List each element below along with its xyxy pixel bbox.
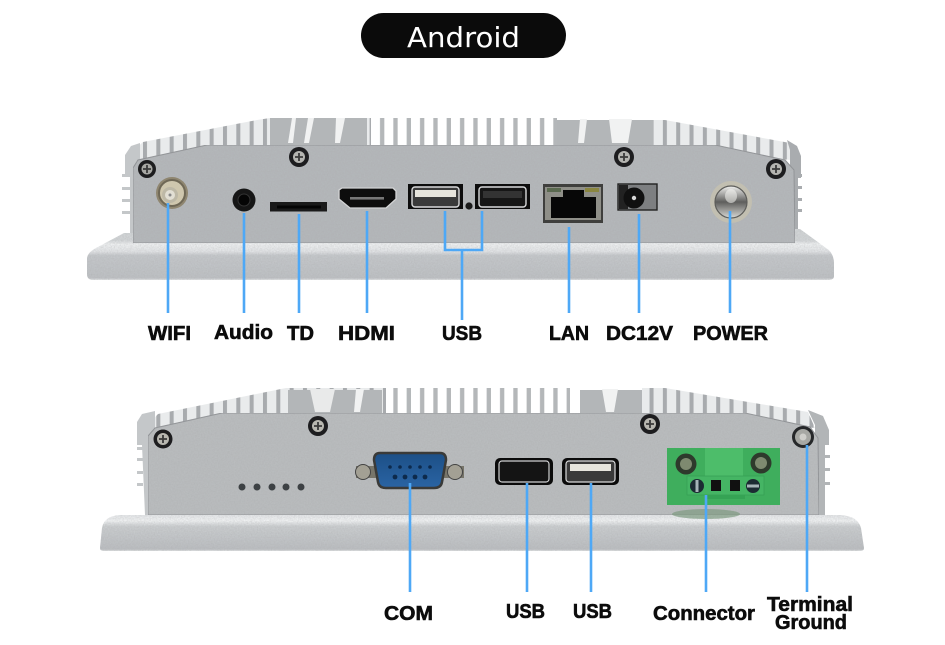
screw (640, 414, 660, 434)
labels: bottom device: Ground (775, 612, 847, 634)
labels: bottom device (384, 594, 853, 634)
USB port (495, 458, 553, 485)
screw (308, 416, 328, 436)
fins: top device (132, 118, 790, 160)
labels: bottom device: USB (573, 601, 612, 623)
labels: top device: POWER (693, 323, 769, 345)
casing right side and side fins (787, 140, 802, 232)
fins: bottom device (148, 388, 815, 430)
terminal ground screw (792, 426, 814, 448)
casing left side and side fins (137, 411, 155, 515)
casing left side and side fins (122, 143, 140, 243)
labels: top device: DC12V (606, 323, 674, 345)
labels: top device: HDMI (338, 323, 395, 345)
device: top view, Android panel rear (87, 118, 834, 280)
labels: top device: WIFI (148, 323, 191, 345)
COM serial port (356, 453, 464, 488)
screw (138, 160, 156, 178)
labels: top device: USB (442, 323, 482, 345)
labels: bottom device: Terminal (767, 594, 853, 616)
labels: bottom device: USB (506, 601, 545, 623)
TD card slot (270, 202, 327, 212)
labels: top device: LAN (549, 323, 589, 345)
labels: top device: Audio (214, 322, 273, 344)
labels: bottom device: COM (384, 603, 433, 625)
USB port (408, 184, 463, 209)
WIFI connector (156, 177, 188, 209)
screw (289, 147, 309, 167)
labels: bottom device: Connector (653, 603, 755, 625)
front bezel: bottom device (100, 515, 864, 551)
screw (154, 430, 172, 448)
casing right side and side fins (808, 410, 830, 515)
screw (766, 159, 786, 179)
title pill: Android (407, 21, 520, 54)
LED holes (238, 484, 304, 490)
DC power jack (618, 184, 657, 210)
title pill (361, 13, 566, 58)
POWER button (710, 181, 752, 223)
HDMI port (339, 188, 396, 208)
Audio jack (232, 188, 256, 212)
USB port (562, 458, 619, 485)
labels: top device: TD (287, 323, 314, 345)
callout lines: top device (168, 203, 730, 320)
green terminal connector (667, 448, 780, 519)
callout lines: bottom device (410, 445, 807, 592)
device: bottom view, Android panel rear (100, 388, 864, 551)
rear panel: bottom device (148, 413, 819, 515)
labels: top device (148, 322, 769, 345)
screw (614, 147, 634, 167)
indicator dot (465, 202, 473, 210)
USB port (475, 184, 530, 209)
rear panel: top device (133, 145, 795, 243)
LAN port (543, 184, 603, 223)
front bezel: top device (87, 229, 834, 280)
